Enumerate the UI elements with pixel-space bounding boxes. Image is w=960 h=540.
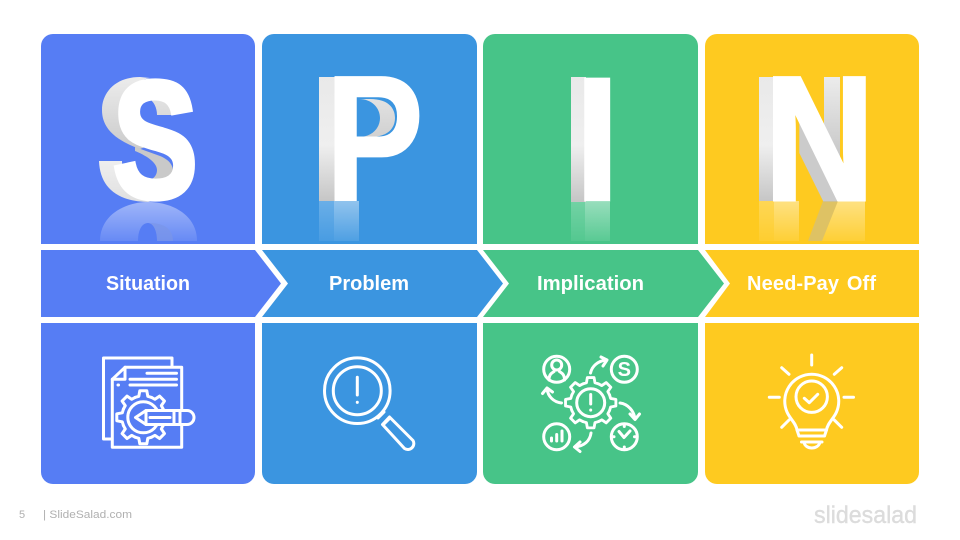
icon label: S in coin: S [618, 359, 631, 381]
panel: letter S: S [112, 46, 198, 233]
footer: page number: 5 [19, 509, 25, 521]
panel: problem icon [262, 323, 477, 484]
icon: light bulb with check mark [769, 355, 854, 448]
icon: documents with gear and pencil [104, 358, 194, 447]
arrow: Situation [41, 250, 281, 317]
panel: implication icon [483, 323, 698, 484]
arrow: Implication: Implication [537, 273, 644, 295]
footer: site name: | SlideSalad.com [43, 509, 132, 521]
panel: need-pay off icon [705, 323, 919, 484]
panel: letter N: N [764, 40, 874, 237]
column: Need-Pay Off [705, 34, 919, 484]
panel: situation icon [41, 323, 255, 484]
panel: letter I [483, 34, 698, 244]
column: Implication [483, 34, 724, 484]
panel: letter S [41, 34, 255, 244]
arrow: Situation: Situation [106, 273, 190, 295]
arrow: Need-Pay Off: Need-Pay Off [747, 273, 876, 295]
column: Problem [262, 34, 503, 484]
panel: letter P [262, 34, 477, 244]
panel: letter I: I [572, 40, 622, 240]
arrow: Need-Pay Off [705, 250, 919, 317]
arrow: Problem: Problem [329, 273, 409, 295]
panel: letter N [705, 34, 919, 244]
column: Situation [41, 34, 281, 484]
arrow: Implication [483, 250, 724, 317]
arrow: Problem [262, 250, 503, 317]
footer: logo wordmark: slidesalad [814, 502, 917, 529]
icon: gear surrounded by cycle of arrows [542, 356, 640, 452]
panel: letter P: P [325, 38, 424, 239]
icon: magnifying glass with exclamation mark [324, 358, 414, 449]
